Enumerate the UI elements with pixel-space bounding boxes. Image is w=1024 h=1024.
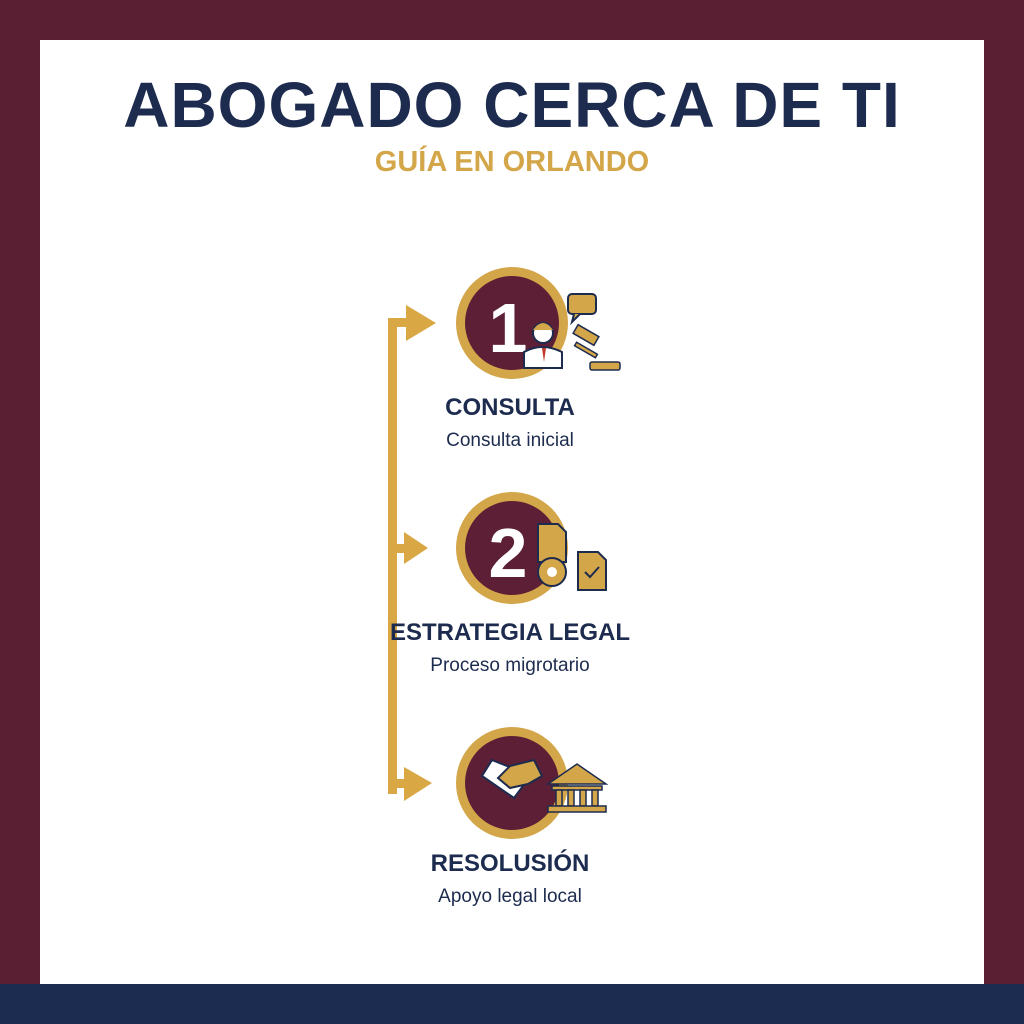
bottom band [0,984,1024,1024]
step 3 label: RESOLUSIÓN [431,850,589,877]
icon: speech bubble [568,294,596,322]
icon: courthouse [548,764,606,812]
step 2 circle: 2 [489,514,527,592]
subtitle: GUÍA EN ORLANDO [375,146,649,178]
step 1 circle [456,267,620,379]
icon: documents and gear [538,524,606,590]
step 2 label: ESTRATEGIA LEGAL [390,619,630,646]
step 1 circle: 1 [489,289,527,367]
step 1 label: CONSULTA [445,394,575,421]
step 1 label: Consulta inicial [446,430,574,451]
icon: handshake [482,760,542,798]
step 3 label [431,849,589,907]
step 2 label: Proceso migrotario [430,655,590,676]
step 3 label: Apoyo legal local [438,886,582,907]
step 1 label [445,394,575,451]
step 2 label [390,619,630,676]
icon: lawyer [524,323,562,368]
icon: gavel [573,325,620,370]
title: ABOGADO CERCA DE TI [123,69,901,141]
step 2 circle [456,492,606,604]
step 3 circle [456,727,606,839]
arrow connector [388,305,436,801]
